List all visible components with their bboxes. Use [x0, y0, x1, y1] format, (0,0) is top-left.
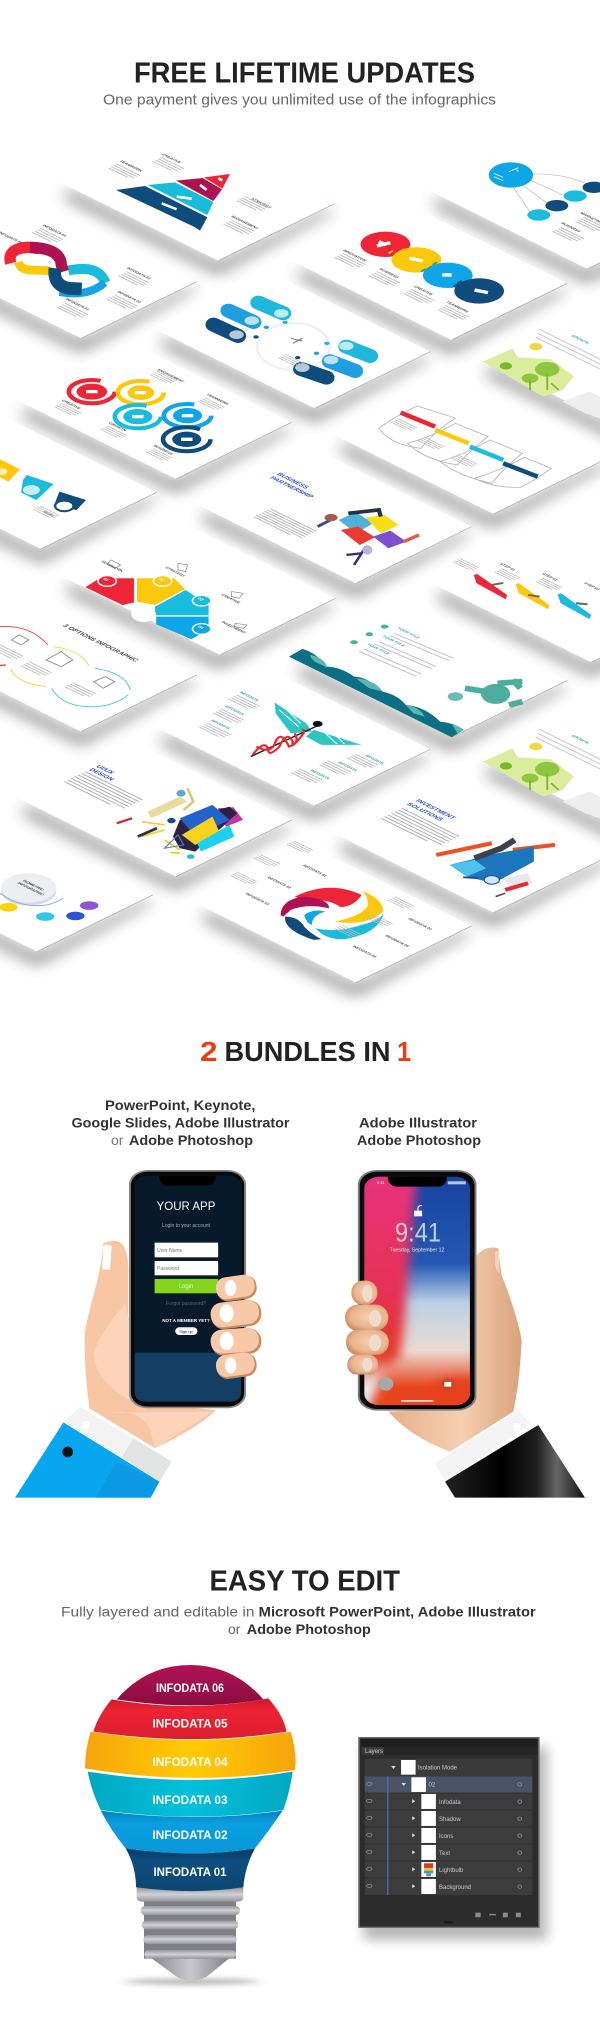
slide: four circles: BUSINESS: [378, 268, 401, 279]
panel: layers palette: Background: [439, 1885, 471, 1891]
slide: infinity loop: INFODATA 03: [125, 267, 153, 280]
panel: layers palette: Icons: [439, 1834, 453, 1840]
illustration: left hand holding login phone: Login to your account: [162, 1223, 211, 1229]
bulb screw base: [137, 1887, 243, 1981]
slide: green eco city repeat: [476, 700, 600, 854]
slide: hexagon segments: STRATEGY: [164, 566, 188, 578]
slide: four circles: TEAMWORK: [445, 301, 471, 313]
slide: infinity loop: INFODATA 01: [64, 298, 92, 311]
slide: diamonds: [429, 525, 600, 679]
illustration: left hand holding login phone: User Name: [157, 1248, 183, 1254]
slide: isometric infographic: ISOMETRIC: [21, 879, 46, 891]
slide: hexagon segments: [57, 518, 336, 672]
panel: layers palette: 02: [428, 1782, 436, 1788]
illustration: left hand holding login phone: NOT A MEMBER YET?: [162, 1318, 210, 1323]
slide: business partnership puzzle: PARTNERSHIP: [268, 476, 316, 499]
illustration: left hand holding login phone: Sign up: [179, 1329, 194, 1334]
slide: water tap: YOUR TITLE: [366, 642, 392, 655]
slide: caduceus: INFODATA: [210, 719, 232, 730]
slide: business partnership puzzle: [193, 446, 471, 600]
slide: caduceus: INFODATA: [309, 769, 332, 780]
slide: ribbon badges: [0, 412, 157, 566]
slide: rings: CREATIVE: [60, 399, 83, 410]
hand: [388, 1247, 522, 1452]
slide: four circles: INNOVATION: [342, 249, 368, 262]
panel: layers palette: Layers: [365, 1749, 383, 1755]
shirt cuff: [435, 1411, 531, 1482]
text: editable description: Fully layered and editable in: [61, 1604, 254, 1620]
text: right phone formats: Adobe Photoshop: [357, 1132, 481, 1148]
slide: four circles: CREATIVE: [412, 285, 435, 296]
text: right phone formats: Adobe Illustrator: [359, 1115, 478, 1131]
fingers over phone: [345, 1281, 389, 1375]
illustration: infodata lightbulb: [85, 1665, 296, 1985]
illustration: right hand holding lock-screen phone: 9:41: [377, 1180, 386, 1185]
slide: swirl: INFODATA 02: [266, 876, 294, 890]
panel: layers palette: Isolation Mode: [418, 1766, 458, 1772]
heading: 2 bundles in 1: 2: [200, 1036, 218, 1067]
slide: swirl: [193, 841, 471, 999]
text: editable description: or: [228, 1621, 241, 1637]
slide: swirl: INFODATA 05: [384, 934, 412, 948]
slide: infinity loop: INFODATA 04: [41, 224, 69, 238]
slide: hexagon segments: 01: [102, 577, 111, 582]
sleeve: blue: [15, 1422, 159, 1498]
panel: layers palette: Shadow: [439, 1817, 461, 1823]
slide: swirl: INFODATA 06: [351, 945, 379, 959]
phone: login screen: [129, 1170, 246, 1408]
panel: layers palette: [359, 1738, 547, 1940]
slide: ribbon badges: GOAL: [42, 510, 57, 517]
slide: three options: [0, 594, 197, 748]
illustration: right hand holding lock-screen phone: 9:41: [395, 1218, 441, 1248]
slide: rings: GROWTH: [107, 422, 128, 432]
slide: flow nodes: BUSINESS: [560, 222, 583, 233]
slide: isometric infographic: INFOGRAPHIC: [16, 881, 46, 896]
slide: hexagon segments: 02: [157, 577, 167, 582]
illustration: infodata lightbulb: INFODATA 02: [152, 1830, 228, 1842]
slide: caduceus: INFODATA: [238, 691, 261, 702]
slide: pyramid: MANAGEMENT: [230, 215, 261, 230]
heading: easy to edit: EASY TO EDIT: [210, 1566, 400, 1598]
illustration: left hand holding login phone: Password: [157, 1266, 179, 1272]
hand: [85, 1241, 216, 1448]
slide: pyramid: CREATIVE: [161, 153, 183, 164]
slide: four circles: [289, 203, 567, 357]
slide: ui/ux design: [13, 739, 292, 893]
heading: free lifetime updates: FREE LIFETIME UPDATES: [134, 58, 475, 90]
fingers over phone: [209, 1273, 263, 1380]
slide: rings: BUSINESS: [152, 444, 175, 456]
shirt cuff: [63, 1407, 172, 1482]
illustration: right hand holding lock-screen phone: Tuesday, September 12: [390, 1248, 445, 1254]
illustration: left hand holding login phone: Login: [179, 1284, 193, 1290]
illustration: infodata lightbulb: INFODATA 05: [152, 1718, 228, 1730]
slide: pyramid: STRATEGY: [250, 197, 274, 209]
panel: layers palette: Infodata: [439, 1800, 461, 1806]
slide: water tap: YOUR TITLE: [381, 634, 407, 647]
slide: diamonds: STEP 02: [541, 572, 560, 582]
text: left phone formats: Google Slides, Adobe Illustrator: [72, 1115, 290, 1131]
slide: green eco city: [476, 300, 600, 454]
slide: swirl: INFODATA 04: [407, 917, 435, 931]
text: left phone formats: PowerPoint, Keynote,: [105, 1097, 256, 1113]
slide: ui/ux design: DESIGN: [87, 768, 116, 782]
subtitle: one payment: One payment gives you unlimited use of the infographics: [103, 92, 496, 108]
text: right phone formats: [357, 1115, 481, 1148]
text: editable description: [61, 1604, 536, 1637]
slide: diamonds: STEP 01: [499, 562, 518, 572]
slide: business partnership puzzle: BUSINESS: [275, 472, 311, 490]
slide: pyramid: [55, 123, 334, 277]
slide: hexagon segments: CREATIVE: [220, 593, 242, 604]
heading: 2 bundles in 1: 1: [397, 1036, 411, 1067]
slide: swirl: INFODATA 01: [301, 864, 329, 878]
slide: investment solutions: SOLUTIONS: [405, 802, 445, 822]
slide: hexagon segments: TEAMWORK: [99, 560, 125, 573]
illustration: left hand holding login phone: Forgot password?: [166, 1301, 206, 1307]
text: left phone formats: or: [111, 1132, 124, 1148]
illustration: infodata lightbulb: INFODATA 04: [152, 1757, 228, 1769]
slide: rings: [13, 342, 292, 496]
text: left phone formats: [72, 1097, 290, 1148]
slide: green eco city: GROWTH: [570, 334, 591, 344]
slide: caduceus: INFODATA: [363, 754, 386, 765]
slide: rings: TEAMWORK: [205, 393, 231, 406]
illustration: left hand holding login phone: YOUR APP: [157, 1201, 216, 1213]
slide: infinity loop: INFODATA 02: [116, 290, 144, 304]
illustration: left hand holding login phone: [15, 1170, 263, 1498]
slide: swirl: INFODATA 03: [244, 892, 272, 906]
slide: caduceus: INFODATA: [337, 761, 359, 772]
text: editable description: Microsoft PowerPoint, Adobe Illustrator: [259, 1604, 536, 1620]
slide: three options: 3 OPTIONS INFOGRAPHIC: [61, 624, 140, 663]
slide: rings: ENGAGEMENT: [156, 368, 187, 383]
sleeve: black: [445, 1425, 585, 1498]
slide: hexagon segments: INVESTMENT: [220, 621, 248, 634]
slide: investment solutions: [331, 775, 600, 929]
illustration: infodata lightbulb: INFODATA 01: [154, 1867, 227, 1879]
illustration: infodata lightbulb: INFODATA 06: [156, 1683, 224, 1695]
slide: hexagon segments: 04: [196, 625, 206, 630]
text: left phone formats: Adobe Photoshop: [129, 1132, 253, 1148]
slide collage: [0, 123, 600, 999]
slide: process ribbons: [331, 377, 600, 531]
slide: hexagon segments: 03: [196, 597, 206, 601]
slide: pyramid: TEAMWORK: [119, 160, 144, 172]
panel: layers palette: Lightbulb: [439, 1868, 464, 1874]
slide: caduceus: INFODATA: [224, 705, 246, 716]
slide: ui/ux design: UI/UX: [94, 764, 116, 775]
slide: caduceus: [152, 669, 430, 823]
phone: lock screen: [358, 1170, 476, 1411]
illustration: right hand holding lock-screen phone: [345, 1170, 585, 1498]
slide: water tap: YOUR TITLE: [396, 627, 422, 639]
panel: layers palette: Text: [439, 1851, 450, 1857]
heading: 2 bundles in 1: BUNDLES IN: [224, 1036, 390, 1067]
slide: flow nodes: [425, 132, 600, 286]
illustration: infodata lightbulb: INFODATA 03: [152, 1795, 228, 1807]
slide: pill cycle: [152, 271, 430, 425]
text: editable description: Adobe Photoshop: [247, 1621, 371, 1637]
slide: investment solutions: INVESTMENT: [413, 799, 457, 820]
slide: isometric infographic: [0, 814, 153, 968]
slide: infinity loop: [0, 201, 197, 355]
slide: water tap: [289, 600, 567, 754]
